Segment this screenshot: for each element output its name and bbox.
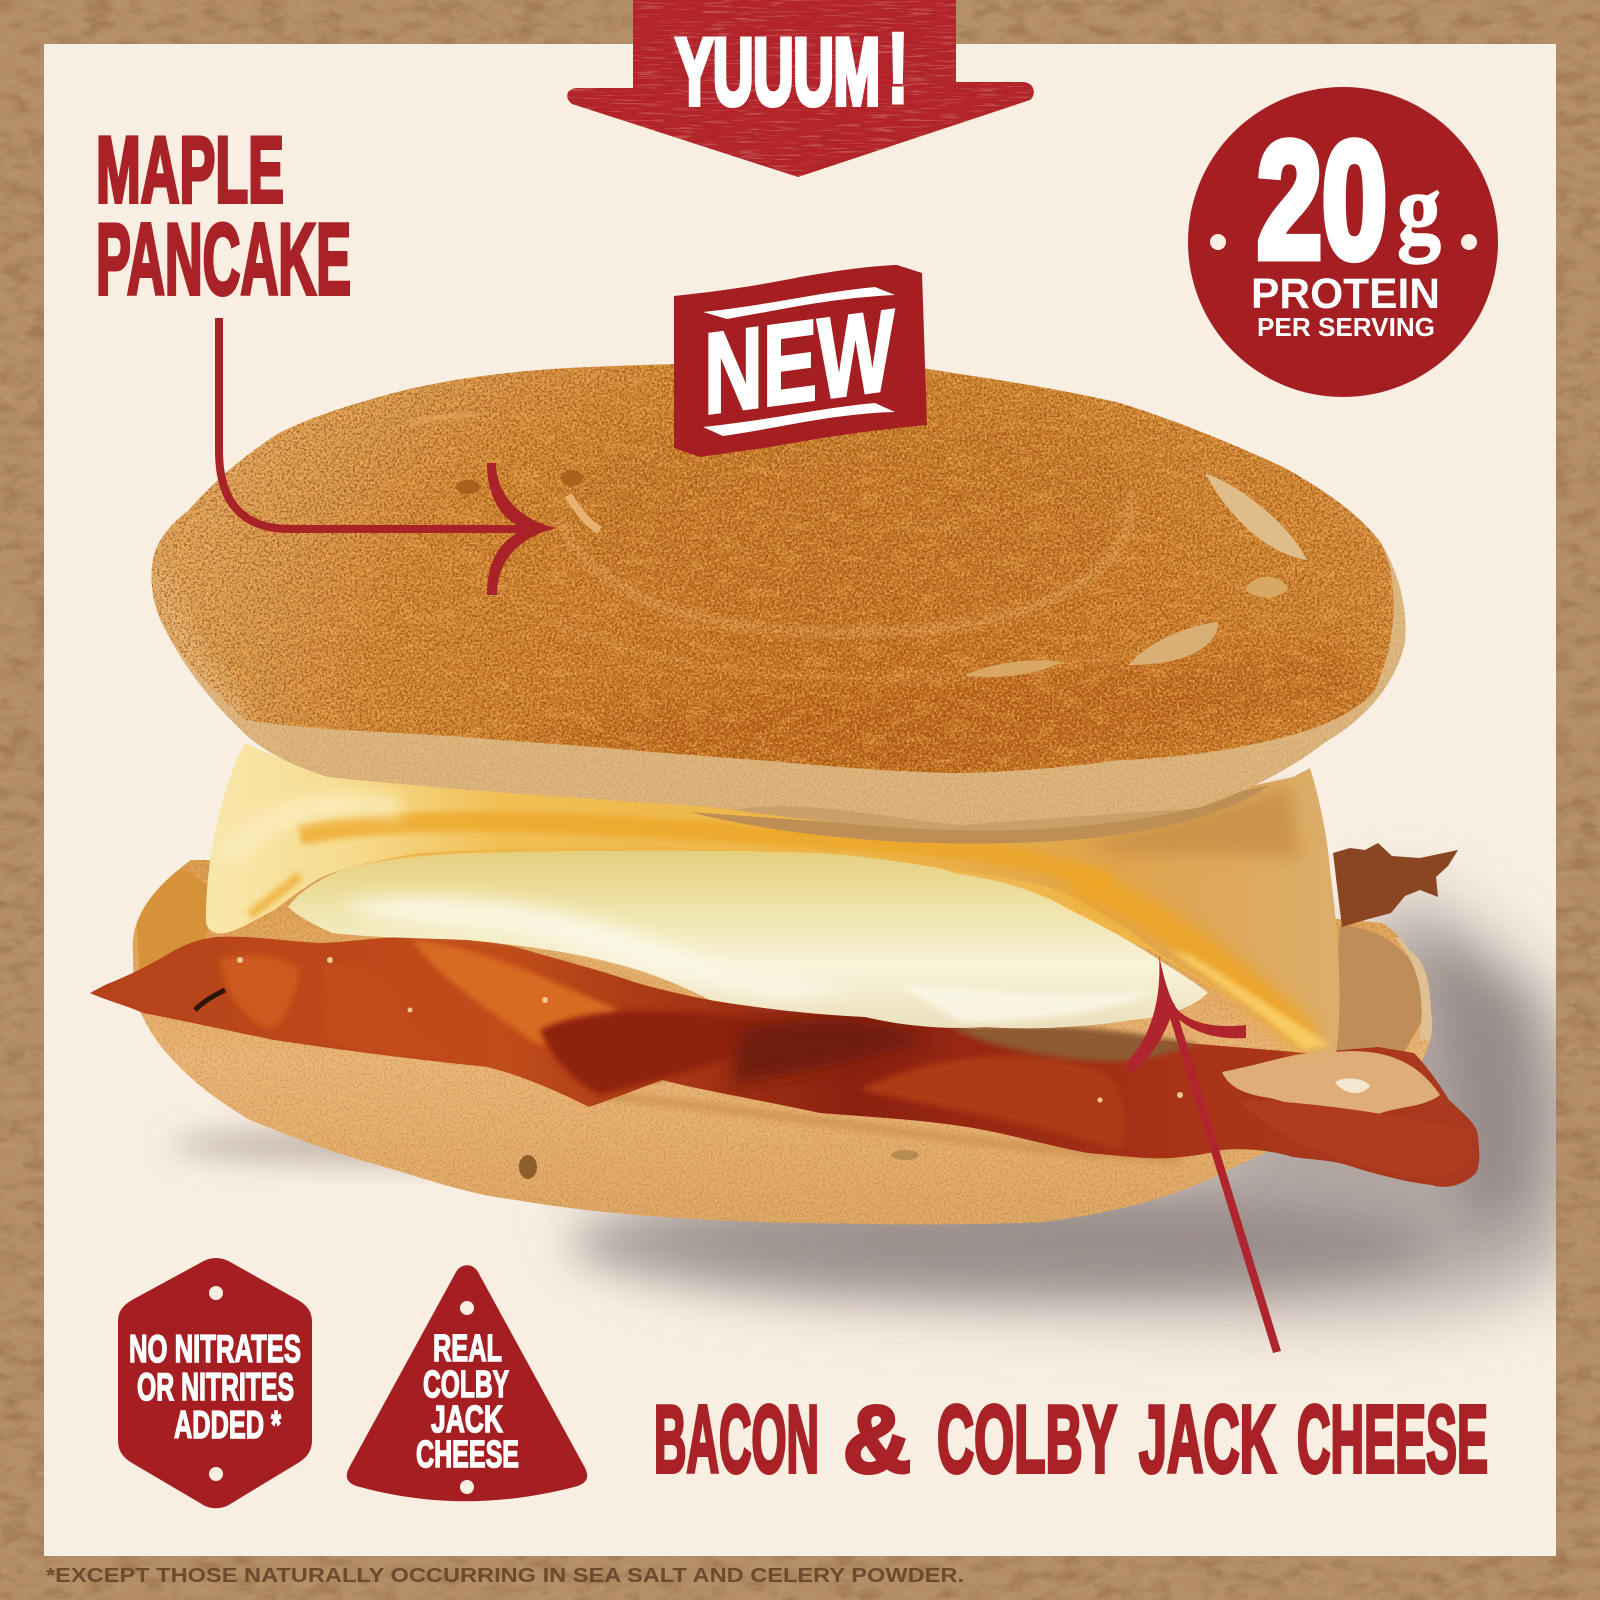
egg [288, 851, 1208, 1028]
yuuum text [676, 13, 908, 124]
bacon and colby jack heading: & [843, 1386, 911, 1493]
no nitrates text: ADDED * [174, 1404, 282, 1447]
cheese underlay [320, 790, 1300, 1040]
no nitrates text [129, 1328, 301, 1447]
new badge [674, 265, 927, 457]
sandwich shadow [170, 890, 1600, 1312]
sandwich photo [90, 360, 1479, 1230]
bacon and colby jack heading: JACK [1139, 1386, 1276, 1493]
footnote: *EXCEPT THOSE NATURALLY OCCURRING IN SEA SALT AND CELERY POWDER. [46, 1565, 964, 1587]
protein badge [1188, 87, 1498, 397]
yuuum text: YUUUM [676, 19, 880, 124]
protein label: PROTEIN [1251, 270, 1440, 318]
yuuum arrow banner [560, 0, 1040, 180]
top pancake [140, 360, 1420, 840]
new text: NEW [704, 285, 894, 439]
back bacon [1333, 843, 1458, 927]
maple pancake heading: PANCAKE [96, 204, 351, 316]
badge: no nitrates [118, 1258, 312, 1508]
grams unit: g [1397, 153, 1441, 264]
protein amount: 20 [1257, 108, 1387, 292]
cheese text [416, 1328, 519, 1476]
bottom pancake [120, 850, 1450, 1230]
bacon and colby jack heading: COLBY [937, 1386, 1117, 1493]
cheese slice [206, 743, 1340, 1055]
maple pancake heading: MAPLE [96, 117, 284, 222]
cheese text: COLBY [423, 1364, 509, 1406]
yuuum text: ! [888, 13, 908, 123]
frilly pancake edge [690, 785, 1270, 843]
cheese text: JACK [431, 1399, 503, 1441]
arrow: maple pancake [215, 318, 556, 595]
badge: real colby jack cheese [347, 1265, 587, 1501]
arrow: bacon and cheese [1126, 955, 1281, 1353]
cheese text: CHEESE [416, 1434, 519, 1476]
maple pancake heading [96, 117, 351, 316]
bacon and colby jack heading: BACON [654, 1386, 819, 1493]
badge dots [1210, 234, 1477, 250]
cheese text: REAL [433, 1328, 502, 1370]
per serving label: PER SERVING [1257, 312, 1435, 342]
bacon and colby jack heading [654, 1386, 1488, 1493]
no nitrates text: OR NITRITES [137, 1366, 294, 1409]
bacon strips [90, 937, 1479, 1187]
no nitrates text: NO NITRATES [129, 1328, 301, 1371]
